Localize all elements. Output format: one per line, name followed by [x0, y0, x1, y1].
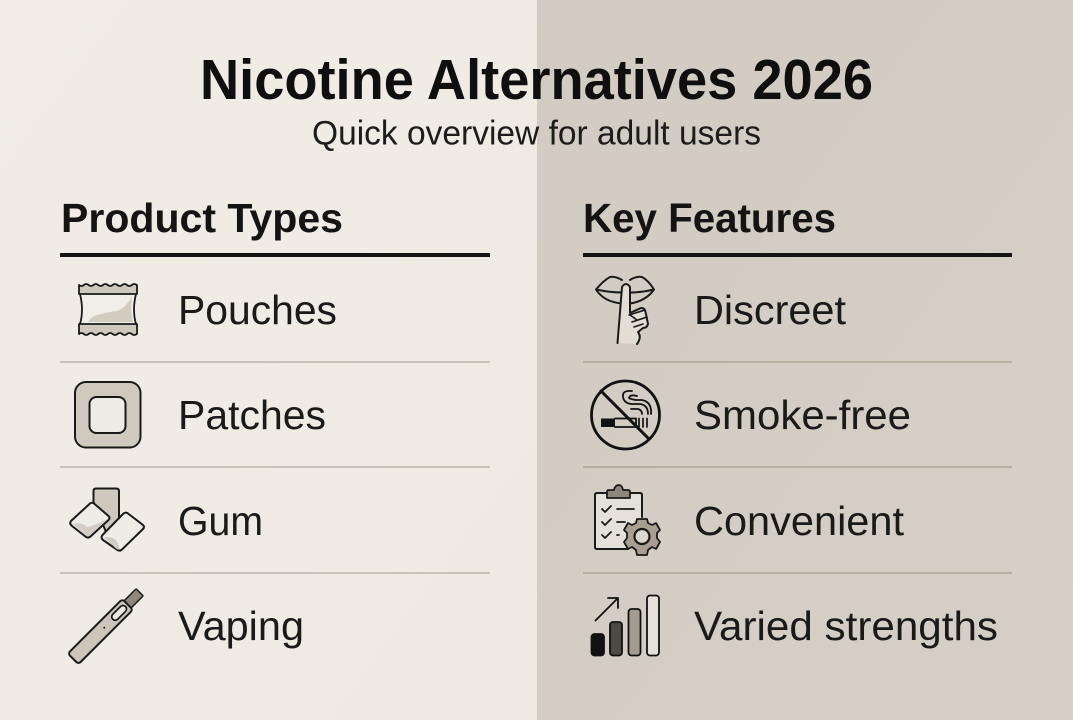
heading: key features: Key Features — [583, 195, 836, 241]
label: discreet: Discreet — [694, 287, 846, 333]
row: varied strengths — [592, 596, 998, 656]
icon: vape pen — [68, 587, 145, 664]
icon: rising strength bars — [592, 596, 659, 656]
label: smoke-free: Smoke-free — [694, 392, 911, 438]
row: smoke-free — [592, 381, 911, 449]
icon: shushing lips and finger — [596, 277, 654, 344]
label: convenient: Convenient — [694, 498, 904, 544]
subtitle: Quick overview for adult users — [312, 114, 761, 152]
heading: product types: Product Types — [61, 195, 343, 241]
panel: product types — [60, 195, 490, 664]
label: pouches: Pouches — [178, 287, 337, 333]
label: gum: Gum — [178, 498, 263, 544]
label: patches: Patches — [178, 392, 326, 438]
row: vaping — [68, 587, 304, 664]
icon: patch — [75, 382, 140, 448]
icon: pouch — [79, 284, 137, 335]
icon: clipboard with gear — [595, 485, 660, 555]
label: varied strengths: Varied strengths — [694, 603, 998, 649]
label: vaping: Vaping — [178, 603, 304, 649]
icon: gum — [70, 488, 144, 551]
panel: key features — [583, 195, 1012, 656]
row: convenient — [595, 485, 904, 555]
icon: no smoking — [592, 381, 660, 449]
background: right half — [537, 0, 1073, 720]
row: patches — [75, 382, 326, 448]
row: discreet — [596, 277, 846, 344]
row: gum — [70, 488, 263, 551]
background: left half — [0, 0, 537, 720]
row: pouches — [79, 284, 337, 335]
title: Nicotine Alternatives 2026 — [200, 48, 873, 111]
